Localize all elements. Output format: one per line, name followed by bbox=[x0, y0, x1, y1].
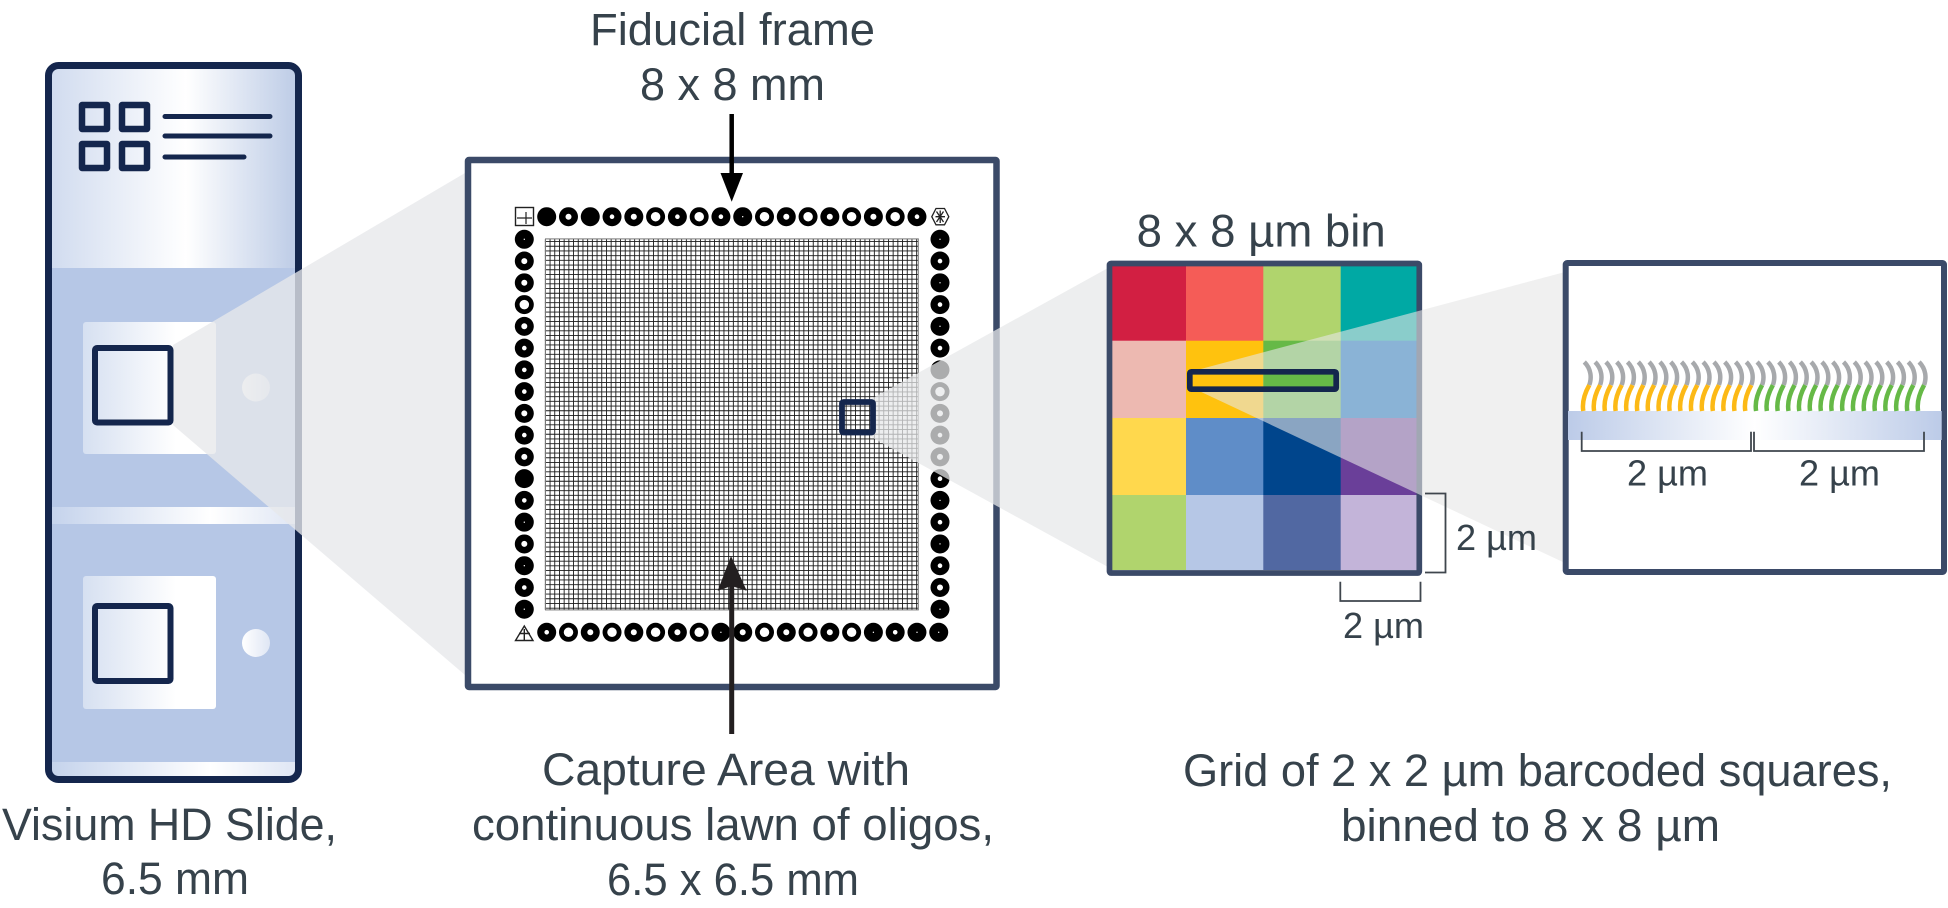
bracket: bin square height bbox=[1425, 494, 1446, 572]
label: 2 um width: 2 µm bbox=[1343, 605, 1424, 646]
icon: slide label grid bbox=[82, 105, 147, 168]
caption: Visium HD slide: Visium HD Slide, bbox=[2, 799, 337, 850]
oligos: gray tails bbox=[1584, 362, 1925, 385]
strip between capture areas bbox=[52, 507, 296, 524]
icon: corner triangle bbox=[516, 626, 533, 640]
capture area band 2 bbox=[52, 524, 296, 762]
bottom strip bbox=[52, 762, 296, 777]
caption: grid of barcoded squares: binned to 8 x 8 µm bbox=[1341, 800, 1720, 851]
alignment dot 1 bbox=[242, 374, 270, 402]
capture window 2 bbox=[83, 576, 216, 709]
oligos: barcode segments gold bbox=[1583, 385, 1751, 411]
icon: corner cross box bbox=[516, 208, 534, 226]
selected bin square bbox=[842, 402, 873, 432]
caption: capture area bbox=[472, 744, 994, 905]
caption: Visium HD slide: 6.5 mm bbox=[101, 853, 249, 904]
icon: slide label text lines bbox=[165, 116, 270, 157]
caption: grid of barcoded squares bbox=[1183, 745, 1892, 851]
capture area band 1 bbox=[52, 268, 296, 507]
label: 2 um height: 2 µm bbox=[1456, 517, 1537, 558]
caption: capture area: Capture Area with bbox=[542, 744, 910, 795]
alignment dot 2 bbox=[242, 629, 270, 657]
arrow: fiducial frame bbox=[720, 114, 743, 202]
panel: fiducial frame bbox=[468, 160, 996, 687]
panel: oligo detail bbox=[1566, 263, 1944, 572]
caption: capture area: 6.5 x 6.5 mm bbox=[607, 854, 859, 905]
oligo lawn grid bbox=[545, 239, 918, 610]
panel: Visium HD slide bbox=[48, 66, 298, 780]
bracket: bin square width bbox=[1340, 582, 1420, 601]
caption: grid of barcoded squares: Grid of 2 x 2 µm barcoded squares, bbox=[1183, 745, 1892, 796]
arrow: capture area bbox=[718, 556, 747, 734]
frame outline bbox=[468, 160, 996, 687]
panel: 8 x 8 um bin bbox=[1110, 264, 1419, 573]
caption: capture area: continuous lawn of oligos, bbox=[472, 799, 994, 850]
substrate band bbox=[1568, 411, 1942, 440]
inner capture square 1 bbox=[95, 348, 170, 422]
colored 2 um squares bbox=[1112, 266, 1417, 570]
label: right 2 um: 2 µm bbox=[1799, 453, 1880, 494]
caption: Visium HD slide bbox=[2, 799, 337, 904]
wedge: slide to fiducial frame bbox=[173, 173, 465, 675]
heading: 8 x 8 um bin: 8 x 8 µm bin bbox=[1137, 206, 1386, 257]
highlighted row of squares bbox=[1190, 372, 1336, 389]
detail frame bbox=[1566, 263, 1944, 572]
capture window 1 bbox=[83, 322, 216, 454]
bracket: right 2 um bbox=[1754, 432, 1924, 451]
heading: fiducial frame: Fiducial frame bbox=[590, 4, 875, 55]
fiducial dots bbox=[524, 217, 940, 632]
inner capture square 2 bbox=[95, 606, 170, 681]
heading: fiducial frame: 8 x 8 mm bbox=[640, 59, 825, 110]
wedge: grid to bin bbox=[871, 268, 1108, 567]
slide outline bbox=[48, 66, 298, 780]
heading: fiducial frame bbox=[590, 4, 875, 110]
bracket: left 2 um bbox=[1582, 432, 1751, 451]
icon: corner hexagon bbox=[932, 208, 949, 225]
bin outline bbox=[1110, 264, 1419, 573]
label: left 2 um: 2 µm bbox=[1627, 453, 1708, 494]
wedge: bin to oligo view bbox=[1197, 272, 1565, 563]
oligos: barcode segments green bbox=[1756, 385, 1924, 411]
